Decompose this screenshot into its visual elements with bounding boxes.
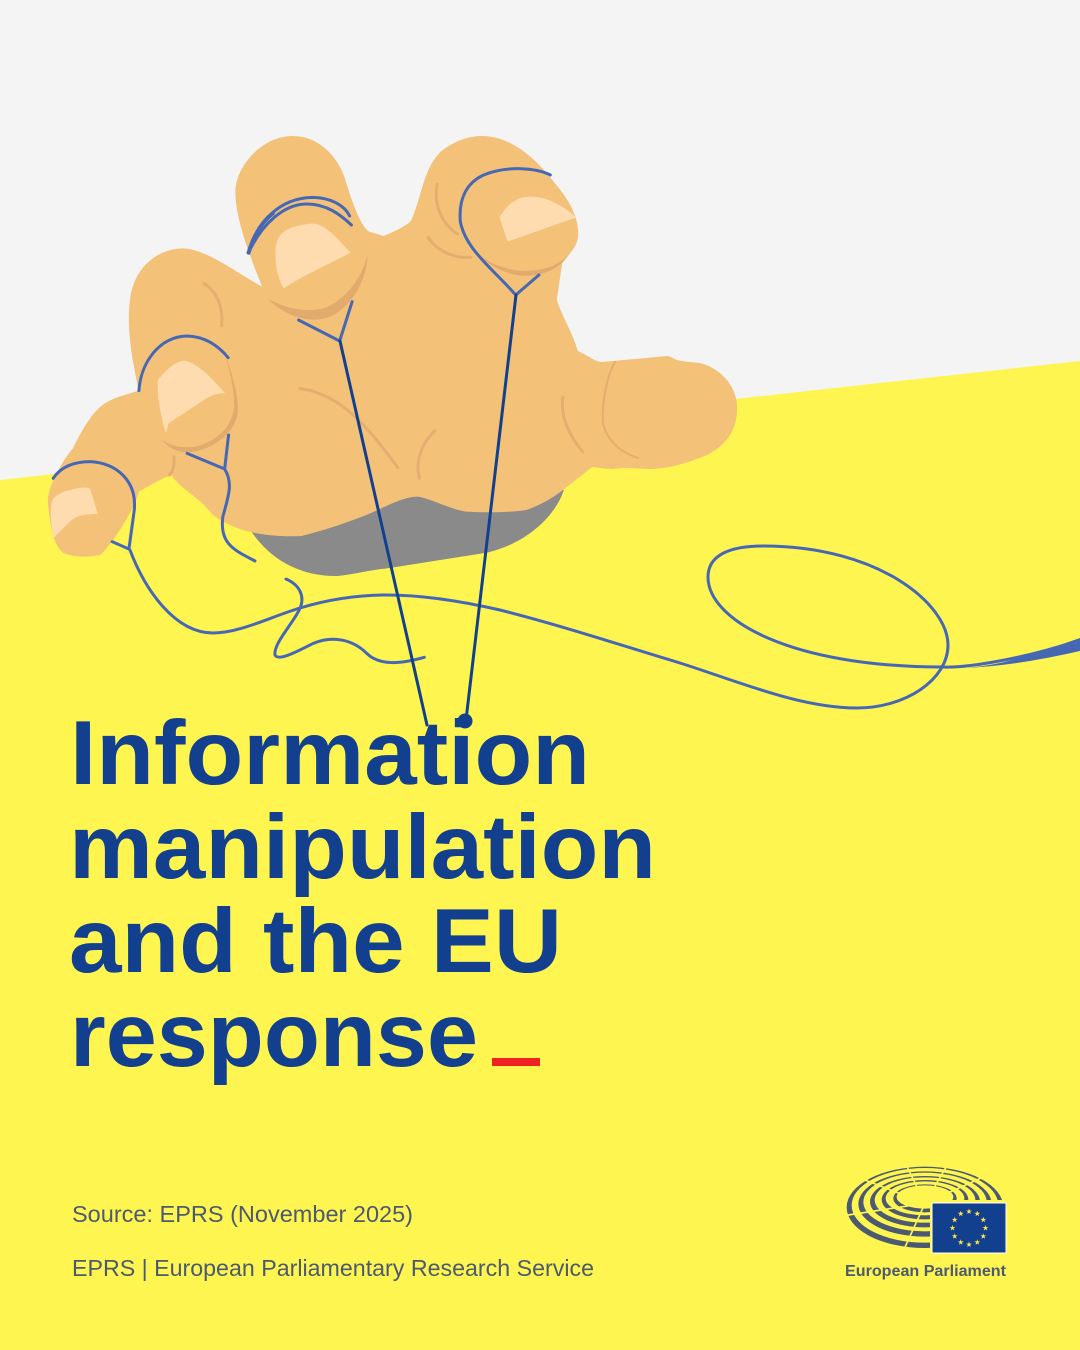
fingernails [51, 197, 576, 538]
loose thread [275, 579, 424, 663]
title: and the EU [69, 891, 562, 992]
hemicycle rings [847, 1167, 1003, 1248]
title: Information [70, 703, 590, 804]
dark string to dot of letter i [466, 295, 516, 720]
EU flag [932, 1203, 1006, 1253]
hemicycle arcs [846, 1166, 1002, 1248]
hand silhouette [48, 136, 737, 557]
title: manipulation [69, 797, 656, 898]
title: response [70, 985, 478, 1086]
long thread from little finger with loop [130, 546, 1080, 708]
flag stars [950, 1208, 988, 1247]
finger shading crescents [162, 253, 569, 452]
round dot on letter i where string ends [458, 714, 472, 728]
publisher text: EPRS | European Parliamentary Research Service [72, 1255, 594, 1281]
skin creases [169, 184, 638, 478]
source text: Source: EPRS (November 2025) [72, 1201, 413, 1227]
puppet string loops on fingers [53, 169, 550, 561]
hand fingers and palm [48, 136, 737, 561]
dark string to letter t [340, 341, 427, 725]
title [69, 703, 656, 1086]
thread tapered end [960, 638, 1080, 668]
logo: European Parliament [842, 1158, 1006, 1280]
hemicycle seat gaps [848, 1168, 981, 1247]
hand shadow [251, 487, 564, 576]
logo wordmark: European Parliament [845, 1263, 1006, 1280]
illustration: hand pulling strings [48, 136, 1080, 725]
red accent dash [492, 1058, 540, 1066]
background: yellow slanted panel [0, 361, 1080, 1350]
